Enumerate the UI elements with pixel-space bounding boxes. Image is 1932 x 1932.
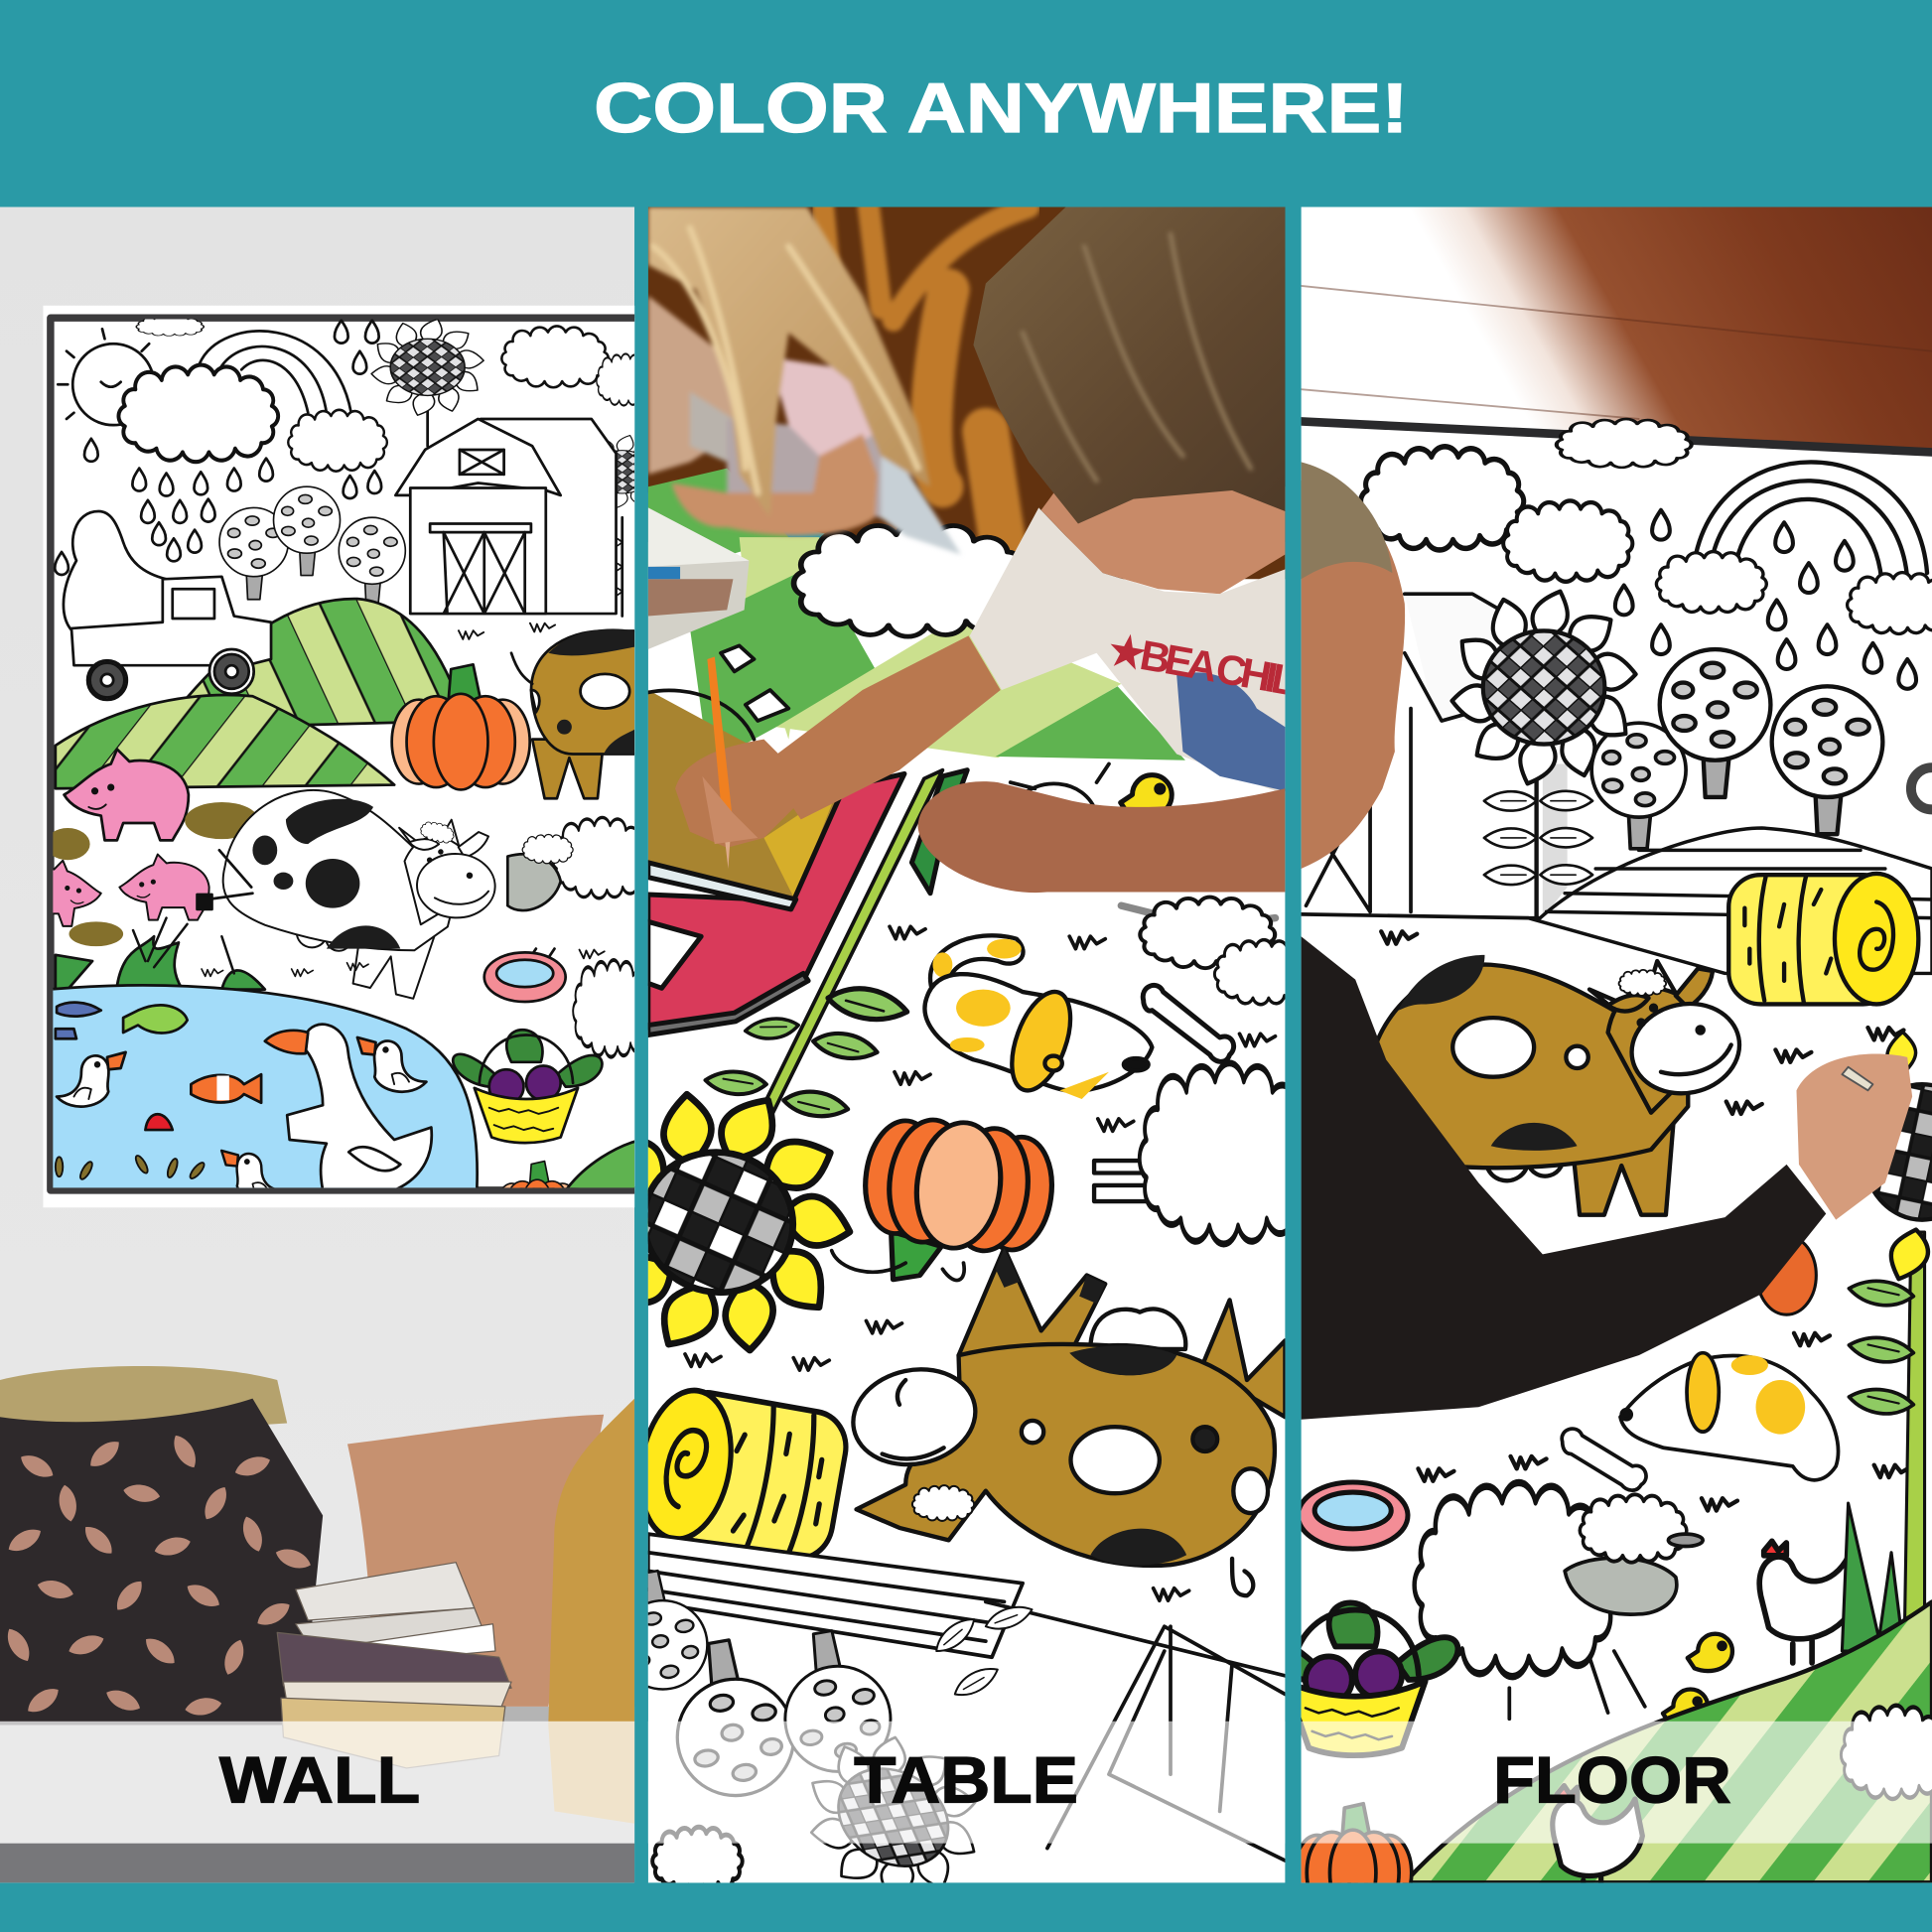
basket	[1257, 1602, 1457, 1755]
sunflower bottom	[777, 1707, 1009, 1929]
label band: floor	[1302, 1722, 1932, 1844]
stem leaves	[705, 984, 909, 1119]
barn bottom	[986, 1601, 1285, 1861]
sheep cloud	[794, 523, 1030, 636]
barn window	[648, 921, 701, 988]
fish	[56, 1003, 261, 1103]
chairs	[823, 207, 1029, 554]
poster base	[1302, 419, 1932, 1885]
barn	[395, 419, 617, 614]
pond	[50, 985, 478, 1190]
small flowers	[721, 645, 788, 721]
poster frame	[43, 306, 647, 1207]
striped hill	[1528, 828, 1932, 973]
bone	[1143, 985, 1234, 1061]
chicken	[1759, 1541, 1857, 1663]
patterned basket	[0, 1399, 323, 1725]
trees	[1591, 649, 1882, 849]
pond reeds	[56, 1154, 207, 1180]
fence hill	[648, 1534, 1023, 1657]
pumpkin	[852, 1110, 1059, 1300]
grass tufts	[1381, 931, 1910, 1511]
pear	[64, 511, 167, 634]
trees	[607, 1565, 898, 1805]
spotted cow	[196, 788, 496, 1000]
orange pumpkin part	[1757, 1236, 1816, 1314]
green hill	[1405, 1601, 1932, 1882]
sheep	[1415, 1482, 1703, 1719]
pumpkin	[392, 664, 530, 789]
gold panel	[763, 788, 838, 899]
sunflower	[370, 319, 485, 446]
truck	[71, 577, 271, 700]
table top green	[648, 469, 788, 579]
pencil	[1842, 1067, 1872, 1090]
sunflower	[561, 1067, 876, 1377]
brown cow	[510, 628, 635, 800]
chicks	[1457, 1634, 1777, 1856]
tall grass	[1842, 1503, 1903, 1651]
poster green hill	[996, 686, 1185, 760]
label: table: TABLE	[854, 1743, 1078, 1817]
sheep top right	[1121, 897, 1311, 1005]
dog	[1620, 1353, 1838, 1480]
shirt print	[1176, 672, 1285, 791]
man hair	[1302, 462, 1392, 579]
sunflower	[1449, 592, 1638, 918]
chick	[1121, 775, 1172, 817]
leaves bottom	[930, 1600, 1035, 1702]
dark leaves	[911, 770, 967, 894]
man head	[1302, 481, 1405, 869]
panel: table	[561, 207, 1313, 1929]
boy second arm	[918, 781, 1285, 893]
sheep mid right	[1094, 1063, 1313, 1244]
poster light green	[740, 537, 819, 740]
white poster base	[648, 542, 1285, 1885]
label band: wall	[0, 1722, 634, 1844]
girl	[648, 207, 961, 554]
rainbow	[1693, 462, 1927, 579]
wood floor	[1302, 207, 1932, 454]
goose	[265, 1025, 432, 1190]
back hill	[188, 599, 466, 727]
cow upside down	[844, 1248, 1285, 1595]
barn roof edge	[648, 973, 808, 1035]
rain drops	[1615, 510, 1916, 689]
grass tufts	[685, 926, 1276, 1600]
panel: wall	[0, 207, 667, 1882]
title: COLOR ANYWHERE!	[594, 69, 1409, 147]
grass tufts	[202, 623, 605, 976]
barn roof red	[648, 773, 904, 1028]
bottom chicken	[1553, 1786, 1642, 1898]
hay bale	[629, 1383, 852, 1566]
brown cow	[1367, 955, 1747, 1215]
barn white strip	[648, 863, 796, 909]
bottom pumpkin	[1295, 1804, 1412, 1916]
poster top edge	[1302, 421, 1932, 452]
chicken	[1011, 763, 1109, 832]
panel: floor	[1257, 207, 1932, 1916]
gold barn area	[648, 690, 850, 899]
bottom sheep	[652, 1827, 743, 1891]
man sleeve	[1302, 936, 1826, 1420]
poster green field	[690, 564, 888, 763]
small pumpkin	[502, 1160, 570, 1187]
label band: table	[648, 1722, 1285, 1844]
poster light strip	[776, 617, 1121, 758]
crayon crate	[648, 507, 750, 649]
floor foreground	[0, 1844, 634, 1882]
hay bale	[1728, 874, 1918, 1004]
sunflower right	[608, 435, 635, 618]
clouds	[118, 317, 653, 472]
rain drops	[55, 321, 381, 575]
boy hand with pencil	[675, 656, 813, 869]
right sunflower stem	[1848, 1232, 1925, 1688]
boy shirt	[970, 507, 1285, 794]
boy face	[1041, 469, 1285, 594]
clouds	[1361, 419, 1932, 633]
front hill	[56, 695, 394, 788]
bone	[1562, 1429, 1646, 1490]
sunflower stem	[747, 770, 942, 1144]
barn	[1302, 594, 1553, 918]
mud	[46, 802, 259, 946]
chair	[548, 1399, 634, 1824]
poster	[51, 318, 654, 1190]
ladybug	[145, 1114, 173, 1130]
basket	[453, 1030, 602, 1143]
ducks	[57, 1037, 426, 1199]
right sunflower	[1811, 1030, 1932, 1279]
boy arm	[763, 635, 1001, 819]
trees	[219, 486, 405, 607]
pillow	[347, 1415, 604, 1707]
basket wheel	[648, 690, 755, 740]
hair highlights	[1023, 234, 1251, 481]
floor	[0, 1707, 634, 1882]
sheep	[507, 817, 651, 1057]
shirt text: ★BEA CHIL	[1105, 625, 1302, 705]
rainbow	[200, 332, 351, 413]
poster artwork	[53, 320, 635, 1187]
green corner	[566, 1140, 635, 1187]
label: wall: WALL	[219, 1743, 420, 1817]
pink pigs	[53, 748, 210, 927]
water bowl	[484, 952, 566, 1002]
pumpkin vines	[832, 1251, 964, 1281]
mustard cloth	[0, 1366, 288, 1425]
floor plank lines	[1302, 286, 1932, 419]
boy hair	[973, 207, 1285, 523]
gear wheel	[1911, 767, 1932, 809]
bottom sheep	[1841, 1706, 1932, 1799]
man hand	[1796, 1053, 1912, 1220]
dog	[925, 935, 1152, 1099]
wood background	[648, 207, 1285, 579]
bowl	[1298, 1482, 1408, 1549]
reeds	[56, 918, 265, 990]
books	[277, 1563, 511, 1768]
label: floor: FLOOR	[1493, 1743, 1731, 1817]
sun	[58, 329, 154, 425]
